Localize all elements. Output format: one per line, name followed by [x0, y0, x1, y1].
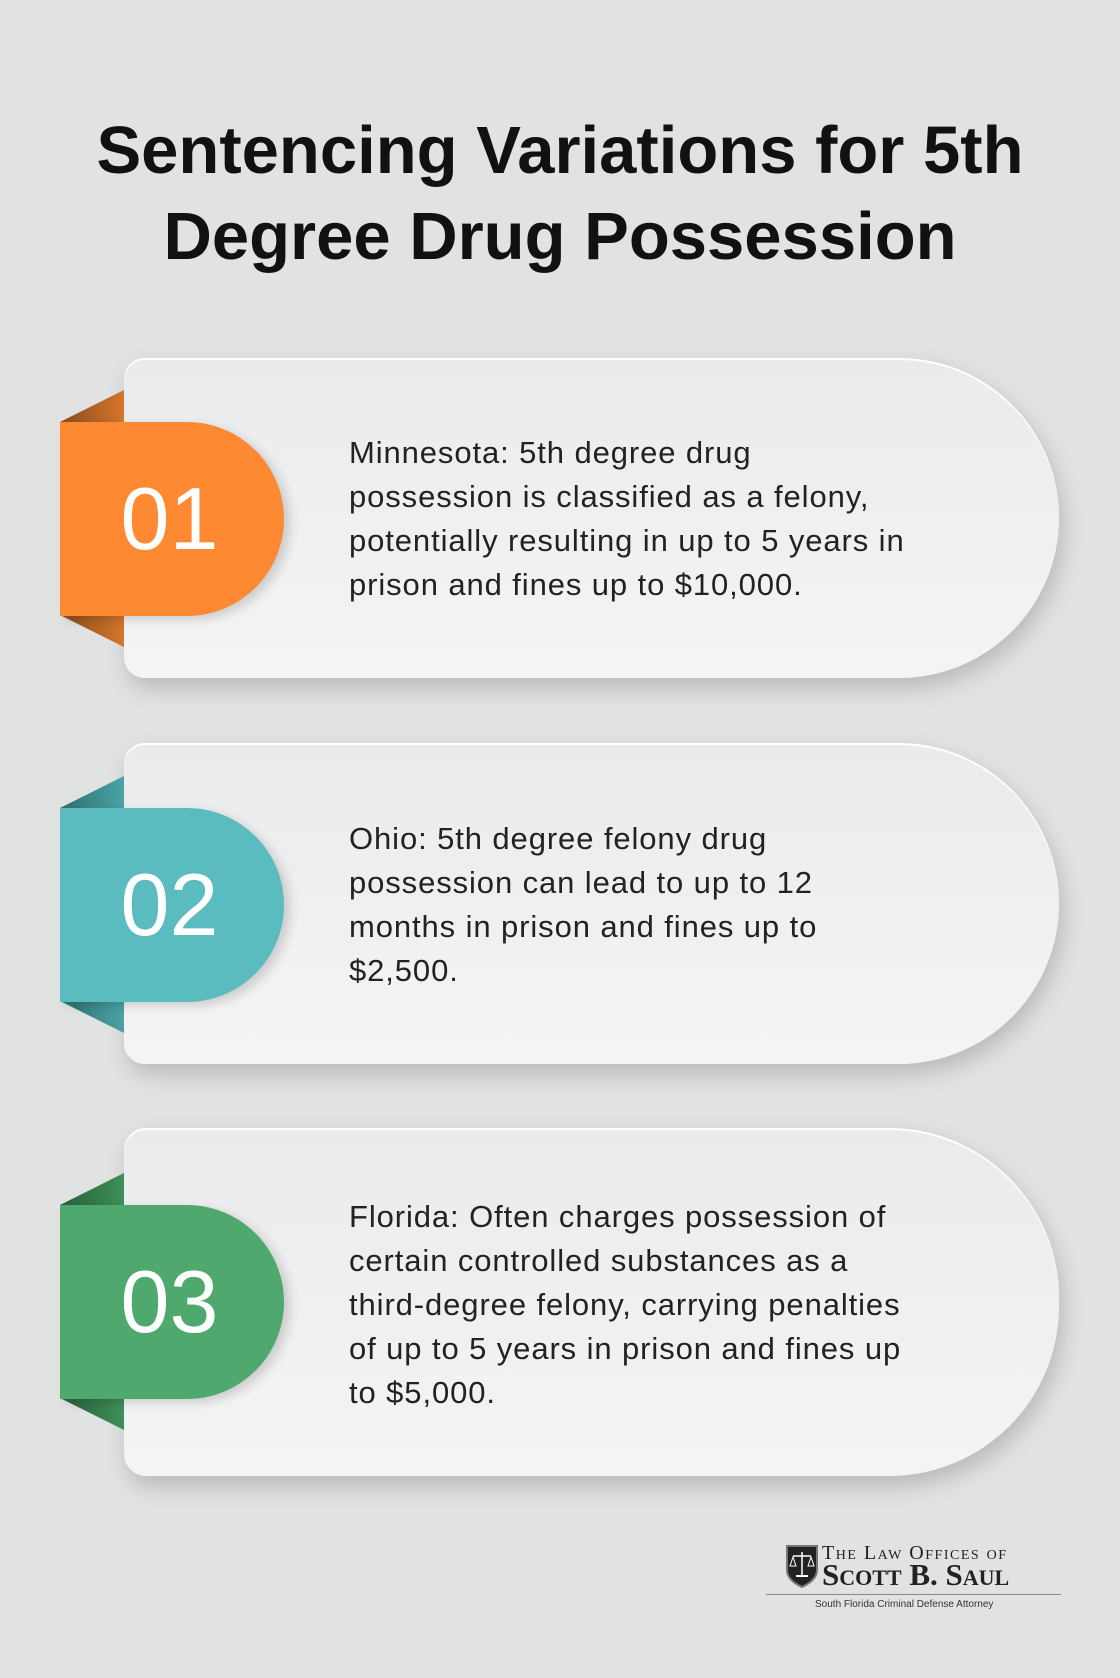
badge 03 — [60, 1205, 284, 1399]
text 3: Florida: Often charges possession of — [349, 1199, 886, 1234]
text 1: prison and fines up to $10,000. — [349, 567, 803, 602]
logo text: The Law Offices of — [822, 1542, 1008, 1564]
fold 2 — [60, 776, 124, 1033]
badge 03: 03 — [121, 1252, 218, 1351]
badge 01 — [60, 422, 284, 616]
title: Degree Drug Possession — [163, 199, 957, 274]
card 2 — [124, 743, 1059, 1064]
badge 01: 01 — [121, 469, 218, 568]
text 3: of up to 5 years in prison and fines up — [349, 1331, 901, 1366]
icon: shield — [786, 1545, 818, 1588]
fold 3 — [60, 1173, 124, 1430]
logo — [766, 1542, 1061, 1610]
text 2: months in prison and fines up to — [349, 909, 817, 944]
text 3 — [349, 1199, 901, 1410]
title: Sentencing Variations for 5th — [96, 113, 1024, 188]
panel: Minnesota — [60, 358, 1071, 696]
text 2: $2,500. — [349, 953, 459, 988]
badge 02: 02 — [121, 855, 218, 954]
text 2: possession can lead to up to 12 — [349, 865, 813, 900]
card 3 — [124, 1128, 1059, 1476]
text 2: Ohio: 5th degree felony drug — [349, 821, 767, 856]
logo: Scott B. Saul — [822, 1557, 1009, 1592]
fold 1 — [60, 390, 124, 647]
title — [96, 113, 1024, 274]
text 1: Minnesota: 5th degree drug — [349, 435, 752, 470]
text 1: potentially resulting in up to 5 years in — [349, 523, 905, 558]
badge 02 — [60, 808, 284, 1002]
text 3: to $5,000. — [349, 1375, 496, 1410]
text 1 — [349, 435, 905, 602]
panel: Ohio — [60, 743, 1071, 1082]
text 3: certain controlled substances as a — [349, 1243, 848, 1278]
text 1: possession is classified as a felony, — [349, 479, 869, 514]
card 1 — [124, 358, 1059, 678]
logo: South Florida Criminal Defense Attorney — [815, 1599, 993, 1610]
text 2 — [349, 821, 817, 988]
text 3: third-degree felony, carrying penalties — [349, 1287, 900, 1322]
